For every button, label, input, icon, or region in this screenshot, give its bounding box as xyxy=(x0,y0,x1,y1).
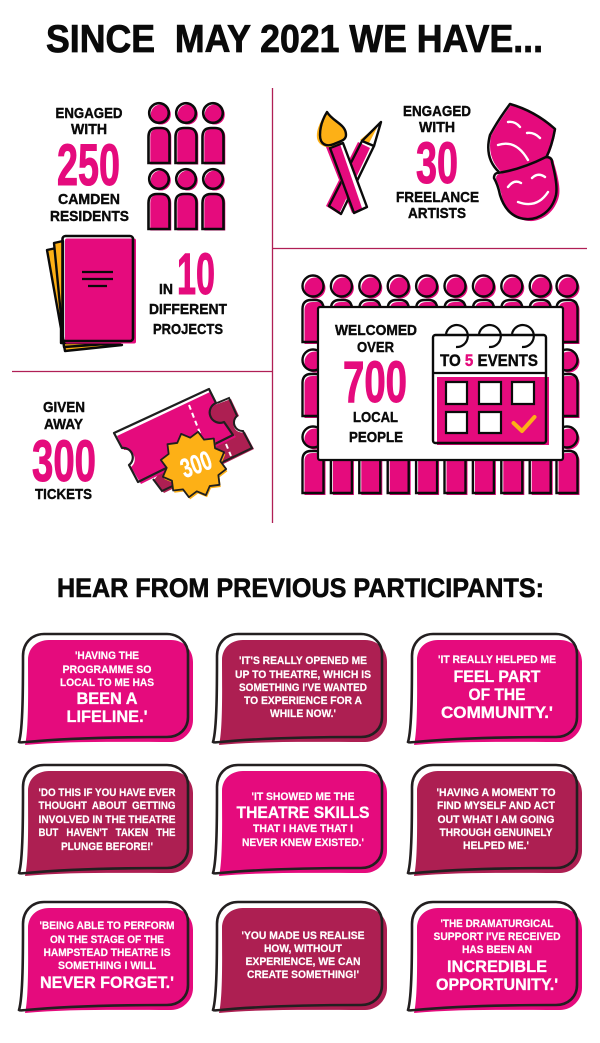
speech bubble: a moment to find myself: 'HAVING A MOMENT TO xyxy=(436,787,556,799)
speech bubble: never forget: NEVER FORGET.' xyxy=(40,973,174,992)
speech bubble: incredible opportunity: OPPORTUNITY.' xyxy=(436,975,558,994)
speech bubble: feel part of the community: OF THE xyxy=(468,685,526,704)
icon: theatre masks xyxy=(488,104,559,221)
text: given away 300 tickets: 300 xyxy=(32,429,96,494)
speech bubble: do this: PLUNGE BEFORE!' xyxy=(61,841,153,853)
speech bubble: incredible opportunity: INCREDIBLE xyxy=(447,957,547,976)
panel: 250 Camden residents xyxy=(50,103,225,230)
text: engaged with 250 Camden residents: ENGAGED xyxy=(56,105,123,122)
speech bubble: a moment to find myself: OUT WHAT I AM GOING xyxy=(438,814,555,826)
text: engaged with 30 freelance artists xyxy=(396,103,479,222)
speech bubble: feel part of the community: FEEL PART xyxy=(454,667,541,686)
speech bubble: feel part of the community xyxy=(408,634,582,745)
speech bubble: never forget xyxy=(19,902,193,1013)
speech bubble: theatre skills xyxy=(213,765,387,876)
text: welcomed over 700 local people xyxy=(335,322,417,446)
title: SINCE MAY 2021 WE HAVE... xyxy=(46,18,543,61)
icon: tickets with 300 badge xyxy=(114,389,254,504)
speech bubble: been a lifeline: LOCAL TO ME HAS xyxy=(60,677,154,689)
text: welcomed over 700 local people: WELCOMED xyxy=(335,322,417,339)
text: engaged with 250 Camden residents xyxy=(50,105,129,225)
text: welcomed over 700 local people: LOCAL xyxy=(353,409,398,426)
speech bubble: opened me up to theatre: 'IT'S REALLY OPENED ME xyxy=(239,655,367,667)
text: in 10 different projects: 10 xyxy=(177,242,215,307)
white card xyxy=(318,307,563,460)
text: given away 300 tickets xyxy=(32,399,96,503)
speech bubble: incredible opportunity xyxy=(408,902,582,1013)
icon: calendar, to 5 events xyxy=(433,325,549,445)
speech bubble: without experience xyxy=(213,902,387,1013)
speech bubble: incredible opportunity: 'THE DRAMATURGICAL xyxy=(440,918,554,930)
speech bubble: been a lifeline: LIFELINE.' xyxy=(66,707,148,726)
text: given away 300 tickets: GIVEN xyxy=(43,399,85,416)
speech bubble: a moment to find myself xyxy=(408,765,582,876)
speech bubble: without experience: HOW, WITHOUT xyxy=(264,943,342,955)
panel: 30 freelance artists xyxy=(317,103,559,222)
speech bubble: without experience: CREATE SOMETHING!' xyxy=(247,969,359,981)
speech bubble: theatre skills: THAT I HAVE THAT I xyxy=(253,823,353,835)
text: welcomed over 700 local people: OVER xyxy=(357,339,394,356)
speech bubble: a moment to find myself: FIND MYSELF AND ACT xyxy=(437,800,555,812)
text: engaged with 250 Camden residents: CAMDEN xyxy=(58,191,120,208)
speech bubble: been a lifeline xyxy=(19,634,193,745)
icon: six people xyxy=(148,103,225,230)
speech bubble: incredible opportunity: HAS BEEN AN xyxy=(462,944,532,956)
speech bubble: never forget: ON THE STAGE OF THE xyxy=(50,934,164,946)
speech bubble: feel part of the community: COMMUNITY.' xyxy=(441,703,553,722)
speech bubble: been a lifeline: BEEN A xyxy=(76,689,138,708)
text: welcomed over 700 local people: 700 xyxy=(343,350,407,415)
speech bubble: do this: INVOLVED IN THE THEATRE xyxy=(38,814,176,826)
panel dividers xyxy=(12,88,587,523)
speech bubble: opened me up to theatre: TO EXPERIENCE FOR A xyxy=(244,695,362,707)
speech bubble: do this: THOUGHT ABOUT GETTING xyxy=(38,800,176,812)
speech bubble: never forget: SOMETHING I WILL xyxy=(58,960,156,972)
speech bubble: opened me up to theatre: WHILE NOW.' xyxy=(270,708,336,720)
speech bubble: incredible opportunity: SUPPORT I'VE RECEIVED xyxy=(434,931,560,943)
speech bubble: never forget: HAMPSTEAD THEATRE IS xyxy=(44,947,171,959)
speech bubble: opened me up to theatre: SOMETHING I'VE WANTED xyxy=(239,682,367,694)
speech bubble: a moment to find myself: THROUGH GENUINELY xyxy=(440,827,553,839)
speech bubble: been a lifeline: 'HAVING THE xyxy=(75,650,139,662)
speech bubble: never forget: 'BEING ABLE TO PERFORM xyxy=(40,920,174,932)
icon: crowd of people xyxy=(302,276,580,495)
speech bubble: do this: BUT HAVEN'T TAKEN THE xyxy=(38,827,176,839)
speech bubble: theatre skills: NEVER KNEW EXISTED.' xyxy=(242,837,364,849)
speech bubble: without experience: 'YOU MADE US REALISE xyxy=(242,930,365,942)
icon: paintbrush and pencil xyxy=(317,112,381,214)
text: welcomed over 700 local people: PEOPLE xyxy=(349,429,403,446)
text: in 10 different projects: DIFFERENT xyxy=(149,301,227,318)
text: engaged with 30 freelance artists: ARTISTS xyxy=(408,205,466,222)
speech bubble: been a lifeline: PROGRAMME SO xyxy=(62,664,152,676)
speech bubble: opened me up to theatre xyxy=(213,634,387,745)
icon: stack of scripts xyxy=(47,236,136,351)
speech bubble: feel part of the community: 'IT REALLY HELPED ME xyxy=(438,654,556,666)
speech bubble: a moment to find myself: HELPED ME.' xyxy=(463,840,529,852)
text: engaged with 30 freelance artists: ENGAGED xyxy=(403,103,471,120)
speech bubble: do this xyxy=(19,765,193,876)
text: engaged with 30 freelance artists: FREELANCE xyxy=(396,189,479,206)
text: engaged with 250 Camden residents: 250 xyxy=(57,133,120,198)
icon: tickets with 300 badge: 300 xyxy=(176,445,216,484)
speech bubble: opened me up to theatre: UP TO THEATRE, WHICH IS xyxy=(235,669,371,681)
text: engaged with 250 Camden residents: WITH xyxy=(71,121,107,138)
text: engaged with 250 Camden residents: RESIDENTS xyxy=(50,208,129,225)
text: engaged with 30 freelance artists: WITH xyxy=(419,119,455,136)
text: in 10 different projects: IN xyxy=(159,281,173,298)
speech bubble: do this: 'DO THIS IF YOU HAVE EVER xyxy=(38,787,176,799)
text: in 10 different projects xyxy=(149,242,227,338)
heading: hear from previous participants: HEAR FROM PREVIOUS PARTICIPANTS: xyxy=(57,573,544,603)
panel: 700 local people at 5 events xyxy=(302,276,580,495)
speech bubble: theatre skills: 'IT SHOWED ME THE xyxy=(252,791,355,803)
panel: 300 tickets xyxy=(32,389,254,504)
speech bubble: theatre skills: THEATRE SKILLS xyxy=(236,803,370,822)
text: given away 300 tickets: TICKETS xyxy=(35,486,92,503)
icon: calendar, to 5 events: TO 5 EVENTS xyxy=(440,352,538,370)
text: in 10 different projects: PROJECTS xyxy=(153,321,223,338)
speech bubble: without experience: EXPERIENCE, WE CAN xyxy=(246,956,360,968)
panel: 10 different projects xyxy=(47,236,227,351)
text: engaged with 30 freelance artists: 30 xyxy=(416,131,458,196)
text: given away 300 tickets: AWAY xyxy=(44,416,83,433)
